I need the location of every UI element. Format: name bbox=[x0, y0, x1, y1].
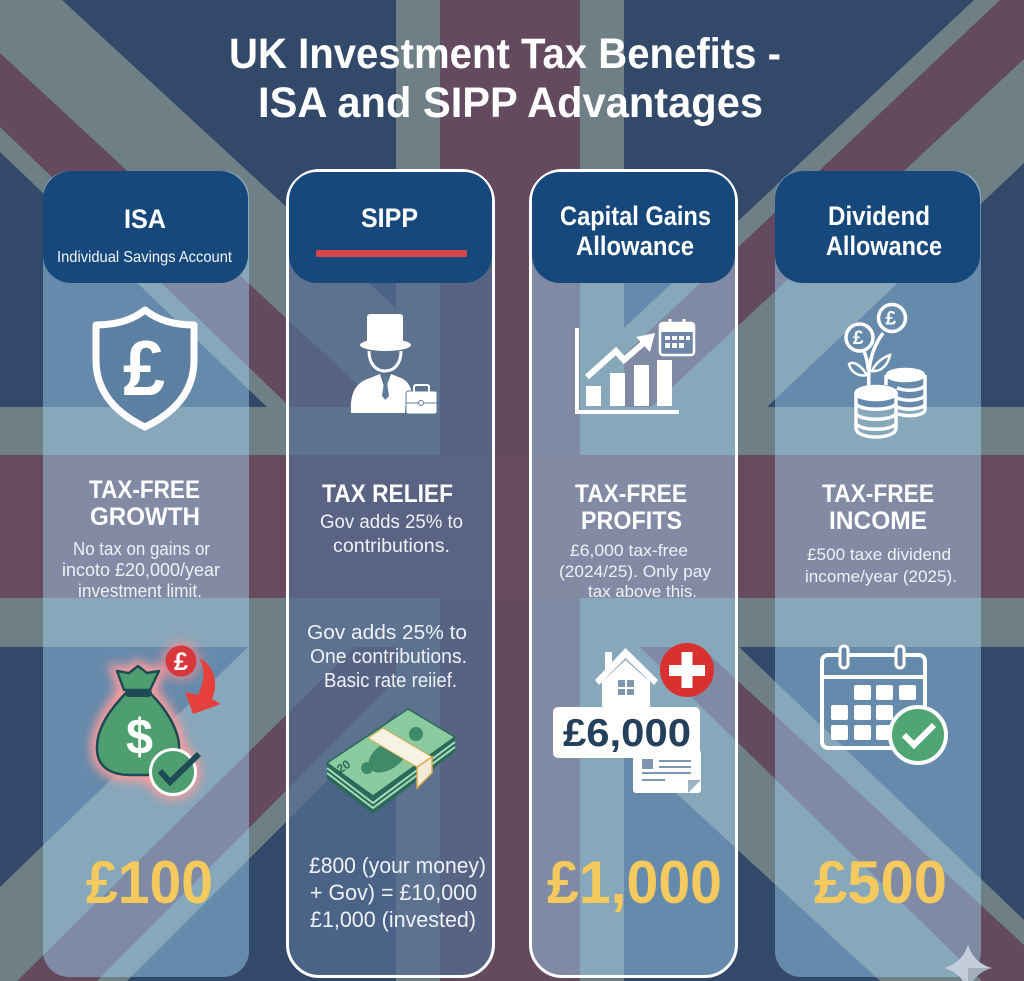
icon: coin plant and coin stacks bbox=[846, 304, 925, 437]
Dividend benefit text: TAX-FREE bbox=[822, 480, 934, 508]
Capital Gains benefit text: tax above this. bbox=[588, 582, 697, 601]
ISA benefit text: TAX-FREE bbox=[89, 476, 200, 504]
SIPP benefit text: TAX RELIEF bbox=[322, 480, 453, 508]
icon: top hat investor with briefcase bbox=[351, 314, 437, 414]
icon: growth chart with calendar bbox=[577, 319, 694, 412]
SIPP relief text: Basic rate reiief. bbox=[324, 670, 457, 692]
SIPP benefit text: contributions. bbox=[333, 536, 450, 557]
SIPP header: SIPP bbox=[361, 203, 418, 233]
Dividend amount: £500 bbox=[814, 849, 947, 916]
panel: SIPP bbox=[288, 170, 494, 976]
panel: Capital Gains Allowance bbox=[530, 170, 736, 976]
ISA header: ISA bbox=[124, 204, 166, 234]
title: UK Investment Tax Benefits - bbox=[229, 30, 781, 78]
icon: sparkle watermark bbox=[944, 944, 992, 981]
SIPP header bbox=[289, 172, 492, 283]
icon: house, plus badge, £6,000 card and document bbox=[553, 643, 714, 793]
SIPP benefit text bbox=[320, 480, 463, 557]
Capital Gains benefit text: PROFITS bbox=[581, 507, 682, 535]
Capital Gains benefit text: (2024/25). Only pay bbox=[559, 562, 712, 581]
icon: stack of banknotes bbox=[327, 709, 455, 814]
Capital Gains header bbox=[532, 172, 735, 283]
icon: coin plant and coin stacks: £ bbox=[886, 308, 896, 330]
SIPP relief text bbox=[307, 622, 467, 692]
icon: shield with pound: £ bbox=[123, 324, 165, 412]
SIPP relief text: Gov adds 25% to bbox=[307, 622, 467, 644]
ISA header bbox=[43, 171, 248, 283]
icon: calendar with green check bbox=[822, 646, 946, 763]
Capital Gains benefit text bbox=[559, 480, 712, 601]
title: ISA and SIPP Advantages bbox=[258, 79, 763, 127]
panel: ISA bbox=[43, 171, 249, 977]
icon: shield with pound bbox=[96, 310, 194, 427]
icon: money bag with check and red pound arrow: £ bbox=[174, 648, 188, 676]
icon: coin plant and coin stacks: £ bbox=[853, 328, 864, 349]
Capital Gains amount: £1,000 bbox=[547, 849, 722, 916]
ISA header: Individual Savings Account bbox=[57, 249, 233, 266]
Capital Gains benefit text: £6,000 tax-free bbox=[570, 541, 688, 560]
icon: stack of banknotes: 20 bbox=[334, 757, 353, 776]
ISA benefit text: GROWTH bbox=[90, 503, 200, 531]
Dividend benefit text: £500 taxe dividend bbox=[807, 545, 951, 564]
icon: house, plus badge, £6,000 card and document: £6,000 bbox=[563, 712, 691, 755]
SIPP worked example: + Gov) = £10,000 bbox=[310, 880, 477, 905]
title bbox=[229, 30, 781, 127]
SIPP benefit text: Gov adds 25% to bbox=[320, 512, 463, 533]
ISA benefit text bbox=[62, 476, 220, 601]
icon: money bag with check and red pound arrow: $ bbox=[126, 709, 153, 765]
Dividend header bbox=[775, 171, 980, 283]
SIPP relief text: One contributions. bbox=[310, 646, 467, 668]
ISA benefit text: investment limit. bbox=[78, 581, 202, 601]
Dividend benefit text bbox=[805, 480, 957, 586]
Dividend header: Dividend bbox=[828, 201, 930, 231]
icon: money bag with check and red pound arrow bbox=[97, 641, 221, 800]
ISA amount: £100 bbox=[86, 849, 213, 916]
SIPP worked example: £1,000 (invested) bbox=[310, 907, 476, 932]
Dividend header: Allowance bbox=[826, 231, 942, 261]
panel: Dividend Allowance bbox=[775, 171, 981, 977]
ISA benefit text: No tax on gains or bbox=[73, 539, 210, 559]
SIPP worked example bbox=[309, 853, 486, 932]
Dividend benefit text: income/year (2025). bbox=[805, 567, 957, 586]
ISA benefit text: incoto £20,000/year bbox=[62, 560, 220, 580]
Capital Gains header: Capital Gains bbox=[560, 201, 711, 231]
Capital Gains benefit text: TAX-FREE bbox=[575, 480, 687, 508]
Dividend benefit text: INCOME bbox=[829, 507, 927, 535]
Capital Gains header: Allowance bbox=[576, 231, 694, 261]
SIPP worked example: £800 (your money) bbox=[309, 853, 486, 878]
